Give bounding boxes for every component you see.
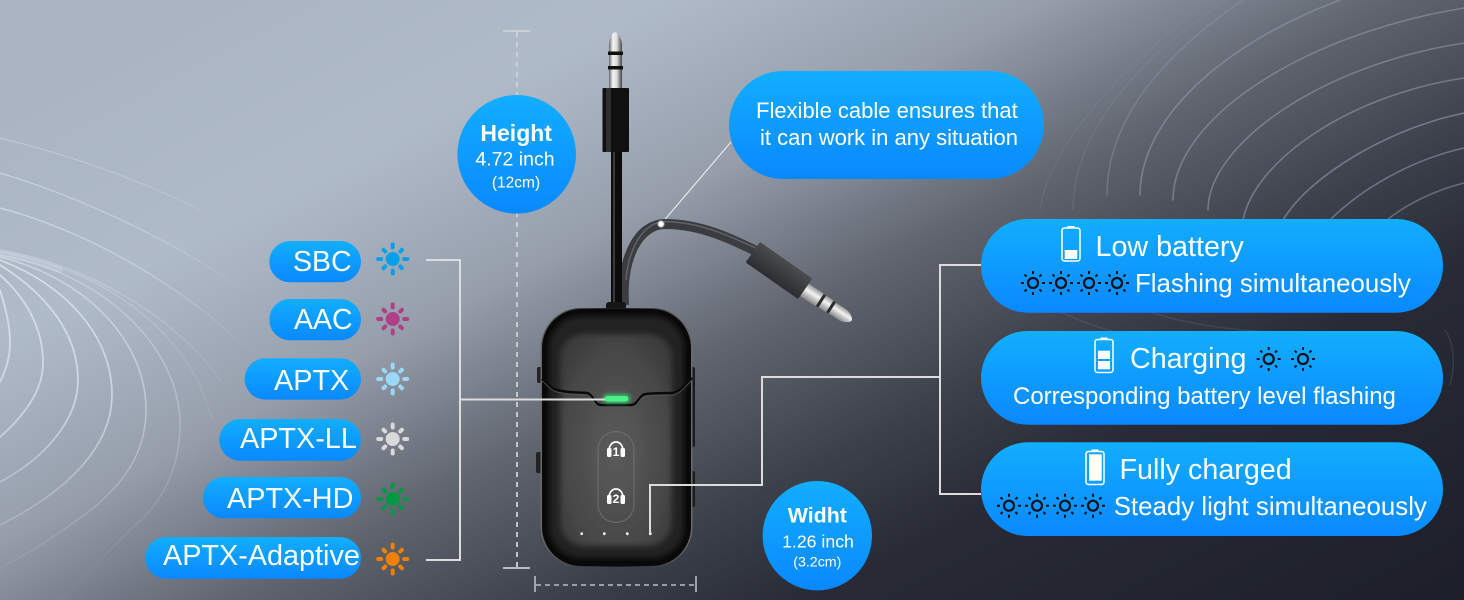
panel: fully charged: Fully charged xyxy=(1120,454,1292,486)
icon: full battery xyxy=(1086,450,1104,484)
codec: APTX-HD: APTX-HD xyxy=(227,483,353,515)
angled boot xyxy=(746,242,812,299)
flexible cable callout leader xyxy=(661,142,731,224)
LED indicator xyxy=(603,394,630,403)
callout: flexible cable xyxy=(729,71,1044,179)
panel: fully charged xyxy=(981,442,1443,536)
icon: low battery xyxy=(1062,226,1080,261)
codec: APTX xyxy=(245,358,407,400)
codec: SBC xyxy=(269,241,407,282)
badge: width: (3.2cm) xyxy=(793,554,841,570)
badge: height xyxy=(457,95,576,214)
callout: flexible cable: it can work in any situation xyxy=(760,125,1018,150)
height dimension line xyxy=(503,31,530,568)
codec: APTX-LL xyxy=(219,419,407,461)
left sound-wave arcs xyxy=(0,138,250,600)
straight audio cable with top jack xyxy=(602,32,629,313)
bracket connecting codec labels to LED xyxy=(426,260,605,560)
codec: APTX-Adaptive xyxy=(145,537,407,579)
codec: APTX-Adaptive: APTX-Adaptive xyxy=(163,540,360,572)
battery indicator dots xyxy=(580,532,652,535)
panel: low battery: Flashing simultaneously xyxy=(1135,270,1411,298)
device body xyxy=(536,308,695,567)
panel: low battery: Low battery xyxy=(1096,231,1244,263)
bend marker dot xyxy=(658,221,664,227)
jack plug xyxy=(609,32,622,88)
right sound-wave arcs xyxy=(1040,0,1464,385)
bracket connecting battery states to indicator dots xyxy=(650,265,981,533)
boot xyxy=(602,88,629,152)
shell xyxy=(540,308,692,567)
width dimension line xyxy=(535,576,696,592)
codec: AAC: AAC xyxy=(294,304,353,336)
badge: height: Height xyxy=(480,120,552,146)
badge: width: 1.26 inch xyxy=(782,531,854,551)
codec: APTX-LL: APTX-LL xyxy=(240,423,357,455)
icon: headphone 2: 2 xyxy=(613,492,620,506)
icon: four steady lights xyxy=(997,494,1105,518)
side buttons xyxy=(537,367,543,383)
codec: SBC: SBC xyxy=(293,246,352,278)
codec: AAC xyxy=(269,299,407,340)
panel: charging xyxy=(981,331,1443,425)
flexible audio cable with angled jack xyxy=(624,221,856,327)
badge: height: 4.72 inch xyxy=(475,148,555,170)
codec list xyxy=(145,241,407,579)
codec: APTX-HD xyxy=(203,477,407,518)
panel: charging: Charging xyxy=(1130,343,1246,375)
cable xyxy=(611,150,622,305)
icon: four flashing lights xyxy=(1021,271,1129,295)
angled jack plug xyxy=(797,282,856,327)
icon: headphone 1: 1 xyxy=(613,445,620,459)
panel: low battery xyxy=(981,219,1443,313)
icon: charging battery xyxy=(1095,338,1113,372)
icon: headphone 1 xyxy=(607,442,625,459)
panel: charging: Corresponding battery level flashing xyxy=(1013,383,1396,410)
badge: width: Widht xyxy=(788,504,847,528)
codec: APTX: APTX xyxy=(274,365,349,397)
callout: flexible cable: Flexible cable ensures that xyxy=(756,98,1018,123)
lid seam xyxy=(542,378,692,405)
panel: fully charged: Steady light simultaneously xyxy=(1114,493,1427,521)
strain relief xyxy=(606,302,626,313)
badge: height: (12cm) xyxy=(492,174,540,192)
headphone button capsule xyxy=(598,432,634,522)
icon: two flashing lights xyxy=(1257,347,1315,371)
icon: headphone 2 xyxy=(607,489,625,506)
badge: width xyxy=(763,481,872,590)
face highlight xyxy=(560,334,672,546)
